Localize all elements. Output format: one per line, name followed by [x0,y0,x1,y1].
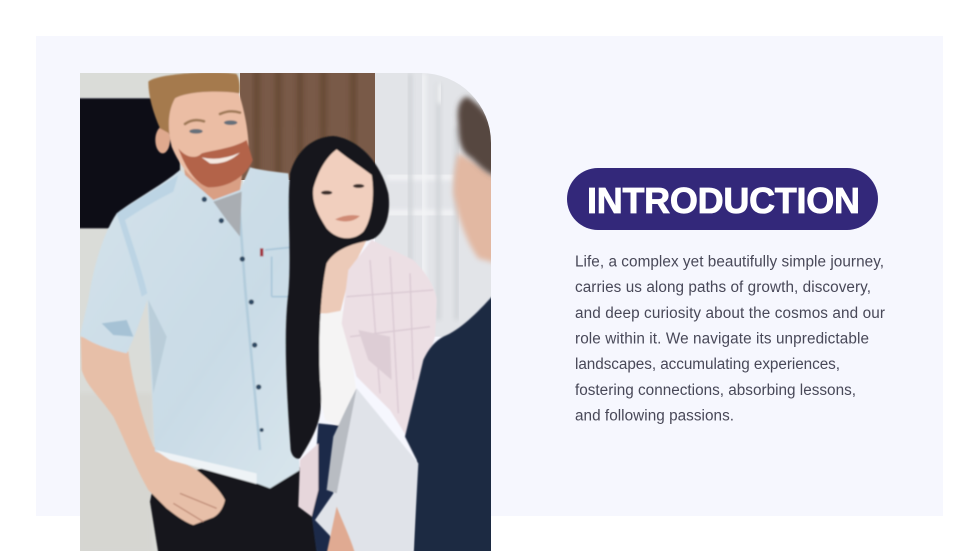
body paragraph: and following passions. [575,408,734,424]
body paragraph: role within it. We navigate its unpredictable [575,330,869,348]
ear [155,127,170,153]
body paragraph: carries us along paths of growth, discovery, [575,279,871,296]
woman [286,136,437,551]
agent hand [327,507,355,551]
grey tee [213,192,242,237]
shirt [80,167,300,488]
man [80,72,318,551]
shirt buttons [202,197,264,432]
shirt hem [298,443,318,517]
body paragraph: landscapes, accumulating experiences, [575,356,840,373]
trousers [149,466,318,551]
body paragraph: fostering connections, absorbing lessons, [575,382,856,399]
foreground agent [315,97,500,551]
body paragraph: Life, a complex yet beautifully simple journey, [575,254,884,270]
long black hair [286,136,389,459]
head [168,88,249,187]
title pill [567,168,878,230]
body paragraph [575,254,885,424]
hair [148,72,240,133]
agent jacket [405,295,493,551]
eyes [189,129,203,134]
jeans [311,422,340,551]
clipboard [315,388,418,551]
arm and hand [81,337,225,525]
plaid shirt [342,240,437,437]
title text: INTRODUCTION [587,180,860,221]
photo: couple with agent [77,70,500,551]
face [313,149,373,238]
white top [318,310,355,426]
beard [178,140,253,187]
agent face [450,152,491,265]
neck [184,169,243,200]
chest [313,237,367,313]
room background [77,70,495,551]
body paragraph: and deep curiosity about the cosmos and our [575,305,885,322]
agent hair [458,97,500,177]
